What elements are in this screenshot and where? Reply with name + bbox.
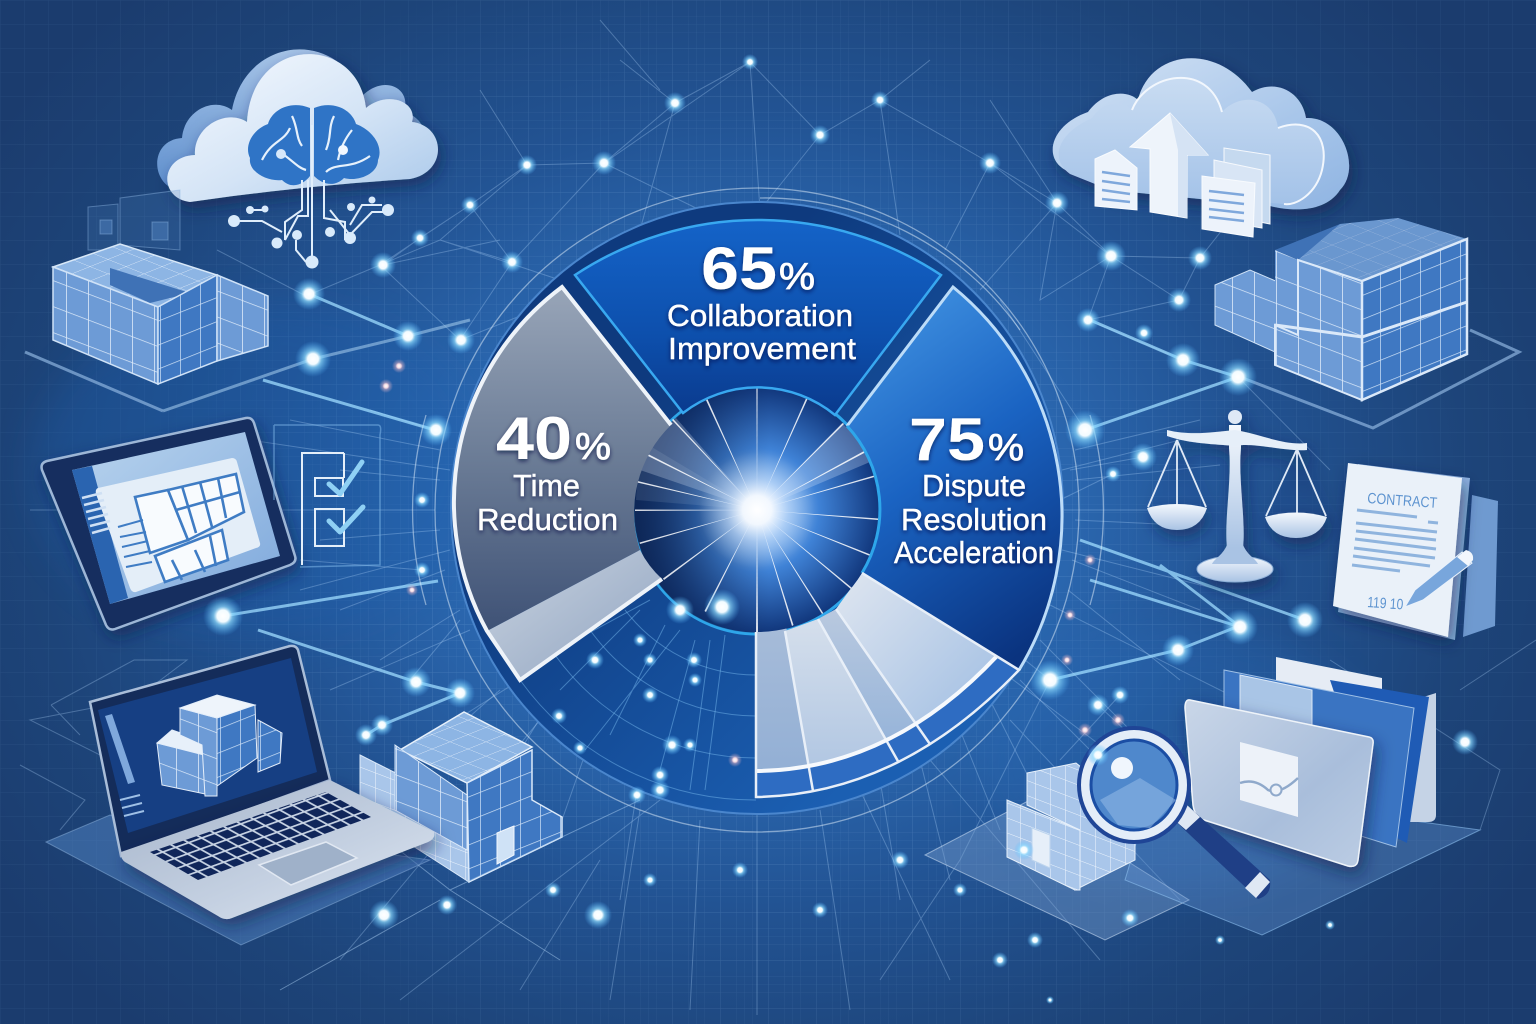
75% label: Dispute	[922, 468, 1026, 503]
75% value: %	[988, 427, 1024, 469]
75% label: Acceleration	[894, 535, 1054, 570]
icon: scales of justice	[1147, 410, 1327, 582]
contract number: 119 10	[1367, 594, 1404, 614]
65% label	[667, 298, 856, 366]
lower-left grid sector	[520, 600, 756, 800]
icon: cloud with AI brain	[157, 49, 438, 269]
40% label	[477, 468, 618, 537]
65% value: %	[779, 256, 815, 298]
65% label: Collaboration	[667, 298, 853, 333]
BIM model on screen	[157, 695, 282, 796]
segment: lower stepped wedge	[756, 573, 1019, 800]
folder stack	[1185, 657, 1436, 866]
40% value: %	[575, 426, 611, 468]
icon: folders with magnifier and building	[925, 657, 1480, 940]
contract heading: CONTRACT	[1367, 490, 1438, 512]
75% value: 75	[909, 406, 985, 473]
stacked documents	[1224, 148, 1270, 224]
40% label: Time	[513, 468, 580, 503]
75% label	[894, 468, 1054, 570]
segment: 75% dispute resolution acceleration	[847, 287, 1062, 670]
center burst	[633, 386, 881, 634]
65% value: 65	[701, 235, 777, 302]
icon: laptop with BIM model	[46, 646, 434, 945]
laptop platform	[46, 815, 430, 945]
65% label: Improvement	[668, 331, 856, 366]
75% label: Resolution	[901, 502, 1047, 537]
segment: 40% time reduction	[454, 287, 671, 680]
40% label: Reduction	[477, 502, 618, 537]
folder platforms	[925, 800, 1189, 940]
circuit tree	[234, 125, 388, 262]
segment: 65% collaboration improvement	[575, 220, 941, 415]
icon: right office building	[1215, 218, 1519, 428]
icon: checklist	[274, 425, 381, 567]
floor plan	[135, 474, 244, 582]
icon: left office building	[25, 244, 268, 411]
circular chart: central pie	[451, 202, 1063, 814]
icon: cloud with file upload	[1053, 58, 1349, 237]
icon: contract document with pen	[1333, 463, 1498, 640]
pale accent nodes	[379, 359, 1125, 767]
pen	[1405, 552, 1472, 607]
icon: tablet with floor plan	[42, 418, 295, 630]
upload arrow	[1130, 113, 1208, 218]
chart backing disc	[451, 202, 1063, 814]
tag document	[1095, 150, 1137, 210]
brain	[248, 105, 380, 185]
magnifier	[1079, 728, 1270, 899]
network nodes	[203, 54, 1478, 1004]
icon: lower-left glass building	[280, 712, 640, 990]
40% value: 40	[496, 405, 572, 472]
small building	[1007, 763, 1135, 890]
icon: faint background towers	[88, 190, 180, 250]
